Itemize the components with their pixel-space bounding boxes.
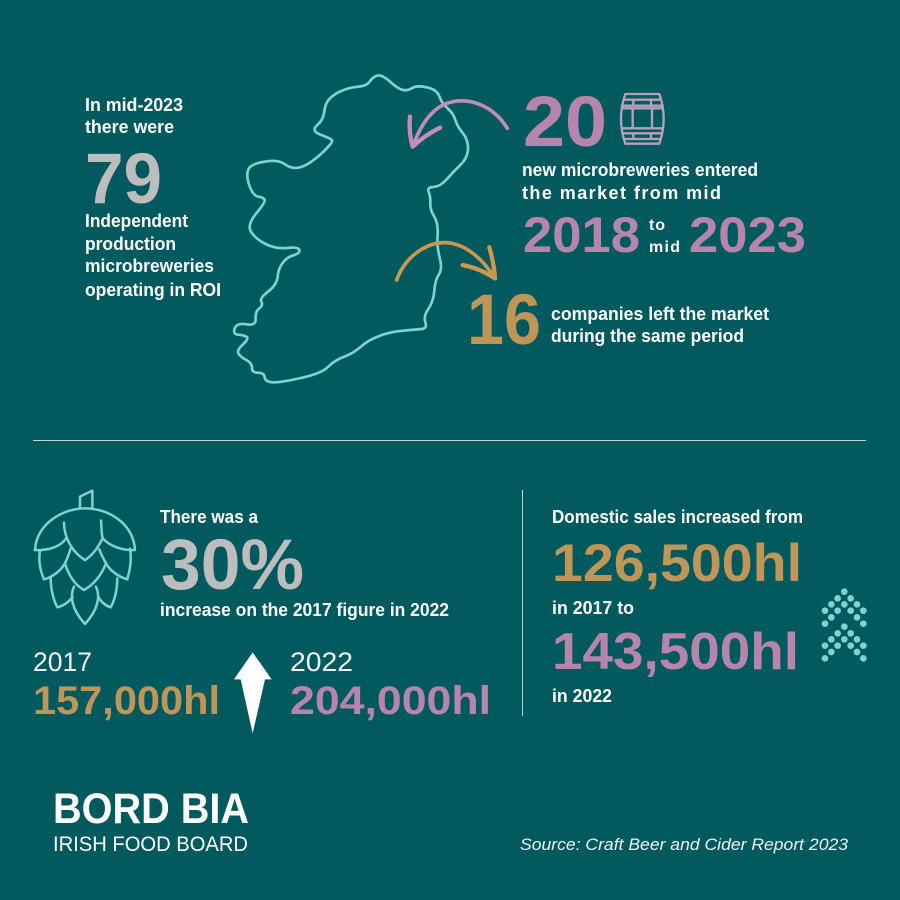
logo: Bord Bia: BORD BIA — [53, 785, 249, 833]
stat: 20 new microbreweries: 2023 — [689, 207, 806, 263]
stat: 16 companies left: during the same period — [551, 326, 744, 346]
stat: 20 new microbreweries: 2018 — [523, 207, 640, 263]
map of Ireland outline — [234, 75, 468, 382]
stat: 20 new microbreweries: 20 — [523, 83, 607, 162]
stat: 20 new microbreweries: new microbreweries entered — [522, 160, 758, 180]
text block: microbreweries count — [85, 95, 221, 300]
text block: microbreweries count: Independent — [85, 211, 188, 231]
arrow: pink curved entering — [410, 101, 507, 147]
stat: 2022 volume — [290, 647, 491, 723]
logo: Bord Bia: IRISH FOOD BOARD — [53, 833, 248, 856]
stat: 2022 volume: 204,000hl — [290, 679, 491, 723]
text block: microbreweries count: 79 — [85, 140, 162, 219]
stat: domestic sales: in 2017 to — [552, 598, 634, 618]
stat: 20 new microbreweries: the market from mid — [522, 183, 721, 203]
stat: 20 new microbreweries: mid — [649, 239, 680, 256]
stat: 20 new microbreweries: to — [649, 217, 665, 234]
text block: microbreweries count: operating in ROI — [85, 280, 221, 300]
icon: barrel — [621, 94, 664, 144]
stat: 30% increase: increase on the 2017 figure in 2022 — [160, 600, 449, 620]
arrow: white up — [234, 652, 272, 733]
stat: 2017 volume: 2017 — [33, 647, 92, 677]
stat: 30% increase: 30% — [161, 526, 304, 605]
icon: hop cone — [35, 491, 135, 624]
stat: 2017 volume — [33, 647, 220, 723]
source note: Source: Craft Beer and Cider Report 2023 — [520, 835, 849, 854]
stat: 30% increase: There was a — [160, 507, 259, 527]
stat: 2017 volume: 157,000hl — [33, 679, 220, 723]
text block: microbreweries count: production — [85, 234, 176, 254]
text block: microbreweries count: there were — [85, 117, 174, 137]
stat: 16 companies left: 16 — [467, 281, 541, 360]
text block: microbreweries count: In mid-2023 — [85, 95, 183, 115]
logo: Bord Bia — [53, 785, 249, 856]
stat: domestic sales — [552, 507, 803, 706]
stat: domestic sales: Domestic sales increased from — [552, 507, 803, 527]
stat: 30% increase — [160, 507, 449, 620]
stat: 20 new microbreweries — [522, 83, 806, 263]
arrow: gold curved leaving — [397, 243, 495, 280]
stat: 16 companies left: companies left the market — [551, 304, 769, 324]
stat: domestic sales: 143,500hl — [552, 623, 799, 681]
stat: 16 companies left — [467, 281, 769, 360]
stat: 2022 volume: 2022 — [290, 647, 353, 677]
stat: domestic sales: 126,500hl — [552, 534, 802, 593]
stat: domestic sales: in 2022 — [552, 686, 612, 706]
icon: dotted double chevron — [822, 588, 867, 662]
text block: microbreweries count: microbreweries — [85, 256, 214, 276]
